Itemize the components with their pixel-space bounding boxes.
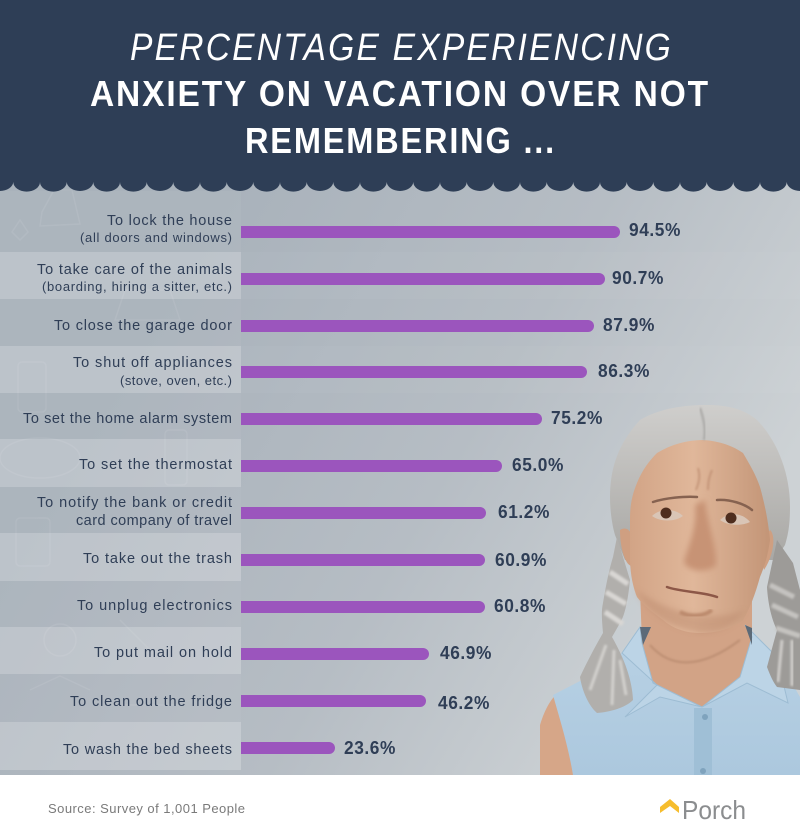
row: alarm: To set the home alarm system bbox=[23, 411, 232, 427]
neck bbox=[640, 590, 752, 707]
row: garage door bbox=[54, 315, 655, 335]
row: electronics: 60.8% bbox=[494, 596, 546, 616]
source note: Source: Survey of 1,001 People bbox=[48, 801, 245, 816]
row: fridge: 46.2% bbox=[438, 693, 490, 713]
shirt bbox=[553, 625, 800, 775]
row: mail: To put mail on hold bbox=[94, 645, 232, 661]
face bbox=[630, 440, 770, 633]
ears bbox=[620, 528, 773, 570]
row: mail bbox=[94, 643, 492, 663]
forehead lines bbox=[696, 468, 712, 490]
left braid bbox=[580, 537, 633, 713]
title: ANXIETY ON VACATION OVER NOT bbox=[90, 73, 710, 114]
row: garage door: To close the garage door bbox=[54, 318, 232, 334]
eyebrows bbox=[653, 497, 752, 510]
back hair bbox=[610, 405, 790, 560]
row: trash: 60.9% bbox=[495, 550, 547, 570]
row: lock the house: 94.5% bbox=[629, 220, 681, 240]
mouth bbox=[667, 587, 717, 597]
row: lock the house: (all doors and windows) bbox=[80, 230, 232, 245]
row: fridge: To clean out the fridge bbox=[70, 694, 232, 710]
row: animals bbox=[37, 262, 664, 294]
row: electronics: To unplug electronics bbox=[77, 598, 232, 614]
row: appliances: (stove, oven, etc.) bbox=[120, 373, 232, 388]
bare arm bbox=[540, 695, 574, 775]
chart background bbox=[0, 170, 800, 775]
row: bank: To notify the bank or credit bbox=[37, 495, 232, 511]
Porch logo: Porch bbox=[682, 795, 746, 825]
row: appliances: 86.3% bbox=[598, 361, 650, 381]
right braid bbox=[767, 540, 800, 690]
illustration: worried woman with braids bbox=[540, 405, 800, 775]
row: bank: card company of travel bbox=[76, 513, 232, 529]
footer bbox=[0, 775, 800, 838]
collar bbox=[622, 625, 788, 717]
row: fridge bbox=[70, 693, 490, 713]
row: alarm bbox=[23, 408, 603, 428]
row: trash bbox=[83, 550, 547, 570]
face shading bbox=[636, 590, 745, 633]
row: garage door: 87.9% bbox=[603, 315, 655, 335]
row: lock the house bbox=[80, 213, 681, 245]
title: REMEMBERING ... bbox=[245, 120, 556, 161]
row: bed sheets: 23.6% bbox=[344, 738, 396, 758]
title: PERCENTAGE EXPERIENCING bbox=[130, 27, 673, 69]
row: bed sheets: To wash the bed sheets bbox=[63, 742, 232, 758]
button placket bbox=[694, 708, 712, 775]
row: alarm: 75.2% bbox=[551, 408, 603, 428]
eyes bbox=[652, 508, 750, 525]
row: mail: 46.9% bbox=[440, 643, 492, 663]
row: trash: To take out the trash bbox=[83, 551, 232, 567]
row: animals: To take care of the animals bbox=[37, 262, 232, 278]
header banner with scalloped edge bbox=[0, 0, 800, 192]
row: animals: (boarding, hiring a sitter, etc.) bbox=[42, 279, 232, 294]
row: appliances bbox=[73, 355, 650, 388]
hair front strands bbox=[700, 408, 705, 440]
row: bank: 61.2% bbox=[498, 502, 550, 522]
row: electronics bbox=[77, 596, 546, 616]
row: appliances: To shut off appliances bbox=[73, 355, 232, 371]
row: thermostat: To set the thermostat bbox=[79, 457, 232, 473]
row: thermostat bbox=[79, 455, 564, 475]
row: thermostat: 65.0% bbox=[512, 455, 564, 475]
title bbox=[90, 27, 710, 161]
row: bank bbox=[37, 495, 550, 529]
row: animals: 90.7% bbox=[612, 268, 664, 288]
row: lock the house: To lock the house bbox=[107, 213, 232, 229]
row: bed sheets bbox=[63, 738, 396, 758]
nose bbox=[684, 500, 716, 571]
